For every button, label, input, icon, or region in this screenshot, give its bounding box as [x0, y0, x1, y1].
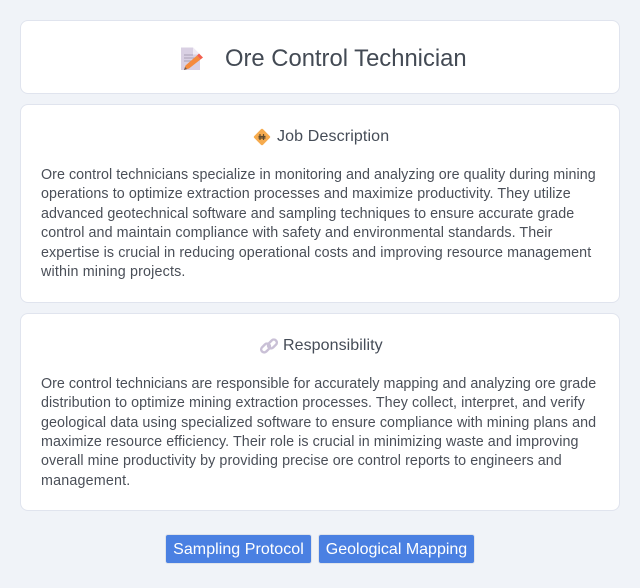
- text block: job description: [41, 166, 596, 280]
- text block: job description: expertise is crucial in reducing operational costs and improving resource management: [41, 244, 591, 260]
- panel: responsibility: [20, 313, 620, 511]
- text block: responsibility: management.: [41, 472, 130, 488]
- title: Ore Control Technician: [225, 45, 467, 72]
- heading: job description: Job Description: [277, 128, 389, 145]
- text block: responsibility: overall mine productivity by providing precise ore control reports to engineers and: [41, 453, 562, 469]
- text block: responsibility: geological data using specialized software to ensure compliance with mining plans and: [41, 414, 596, 430]
- panel: title card: [20, 20, 620, 94]
- text block: responsibility: Ore control technicians are responsible for accurately mapping and analyzing ore grade: [41, 376, 596, 392]
- text block: job description: Ore control technicians specialize in monitoring and analyzing ore quality during mining: [41, 166, 596, 182]
- heading: responsibility: Responsibility: [283, 337, 383, 354]
- text block: responsibility: maximize resource efficiency. Their role is crucial in minimizing waste and improving: [41, 434, 579, 450]
- text block: job description: advanced geotechnical software and sampling techniques to ensure accurate grade: [41, 206, 574, 222]
- tag: sampling protocol: [165, 534, 312, 564]
- text block: responsibility: distribution to optimize mining extraction processes. They collect, interpret, and verify: [41, 395, 585, 411]
- text block: job description: control and maintain compliance with safety and environmental standards. Their: [41, 224, 552, 240]
- text block: responsibility: [41, 376, 596, 488]
- icon: document with pencil: [181, 48, 203, 70]
- tag: geological mapping: Geological Mapping: [326, 541, 467, 558]
- panel: job description: [20, 104, 620, 303]
- text block: job description: within mining projects.: [41, 264, 186, 280]
- tag: geological mapping: [318, 534, 475, 564]
- text block: job description: operations to optimize extraction processes and maximize productivity. They utilize: [41, 186, 571, 202]
- tag: sampling protocol: Sampling Protocol: [173, 541, 304, 558]
- icon: chain link: [260, 338, 278, 354]
- icon: diamond sign: [254, 128, 270, 146]
